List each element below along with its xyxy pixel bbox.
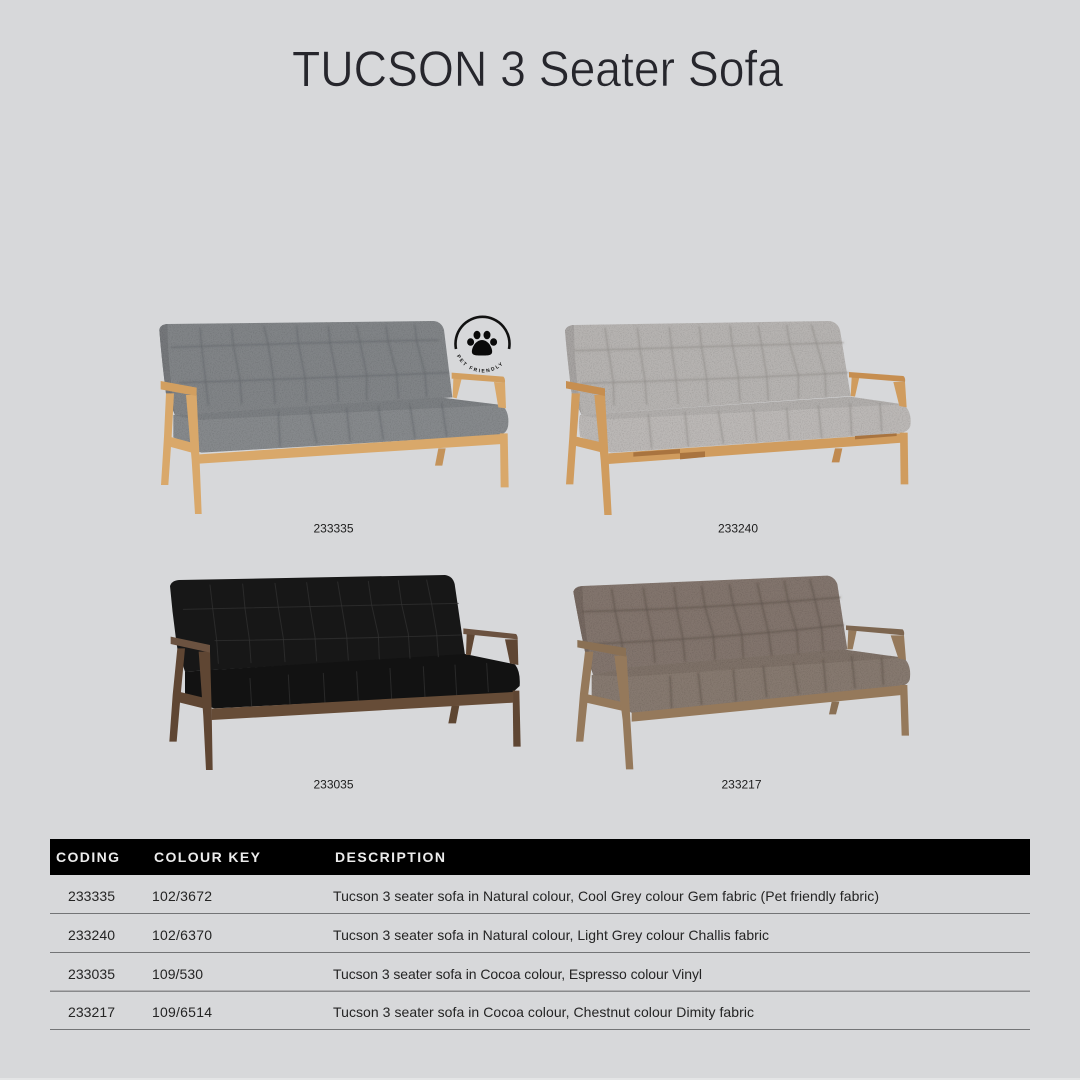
rear leg: [829, 702, 839, 714]
icon: paw: [467, 331, 497, 356]
product: cool grey sofa 233335: [159, 321, 509, 514]
back cushion: [170, 575, 465, 672]
seat cushion: [579, 397, 911, 453]
table header: [50, 839, 1030, 875]
back cushion: [573, 576, 910, 713]
table row 233217: Tucson 3 seater sofa in Cocoa colour, Chestnut colour Dimity fabric: [333, 1004, 754, 1020]
label: 233335: 233335: [313, 522, 354, 536]
table row 233240: 233240: [68, 927, 115, 943]
table row 233217: 109/6514: [152, 1004, 212, 1020]
table row 233035: Tucson 3 seater sofa in Cocoa colour, Espresso colour Vinyl: [333, 966, 702, 982]
table row 233335: 102/3672: [152, 888, 212, 904]
wooden frame: [566, 372, 908, 515]
table row 233335: [50, 888, 1030, 914]
table row 233217: 233217: [68, 1004, 115, 1020]
label: 233035: 233035: [313, 778, 354, 792]
badge text: PET FRIENDLY: [456, 354, 502, 372]
table row 233240: [50, 927, 1030, 953]
table row 233035: 109/530: [152, 966, 203, 982]
seat cushion: [173, 397, 508, 453]
label: 233240: 233240: [718, 522, 758, 536]
table header: DESCRIPTION: [335, 849, 445, 865]
table row 233240: Tucson 3 seater sofa in Natural colour, Light Grey colour Challis fabric: [333, 927, 769, 943]
title: TUCSON 3 Seater Sofa: [292, 41, 783, 97]
table row 233035: 233035: [68, 966, 115, 982]
table row 233335: Tucson 3 seater sofa in Natural colour, Cool Grey colour Gem fabric (Pet friendly fabric): [333, 888, 879, 904]
badge: pet friendly: [454, 316, 511, 372]
table: [50, 839, 1030, 1030]
table header: CODING: [56, 849, 119, 865]
table row 233335: 233335: [68, 888, 115, 904]
table header: COLOUR KEY: [154, 849, 261, 865]
table row 233240: 102/6370: [152, 927, 212, 943]
rear leg: [832, 448, 842, 462]
rear leg: [435, 448, 446, 466]
back cushion: [565, 321, 911, 453]
badge arc: [456, 317, 510, 349]
product: espresso vinyl sofa 233035: [169, 575, 521, 770]
seat cushion: [592, 649, 910, 713]
back cushion: [159, 321, 508, 453]
product: chestnut sofa 233217: [573, 576, 910, 769]
label: 233217: 233217: [721, 778, 762, 792]
wooden frame: [576, 625, 909, 769]
wooden frame: [169, 628, 521, 770]
table row 233217: [50, 1004, 1030, 1030]
wooden frame: [161, 373, 509, 514]
product: light grey sofa 233240: [565, 321, 911, 515]
seat cushion: [185, 654, 520, 708]
rear leg: [448, 706, 459, 723]
table row 233035: [50, 966, 1030, 992]
